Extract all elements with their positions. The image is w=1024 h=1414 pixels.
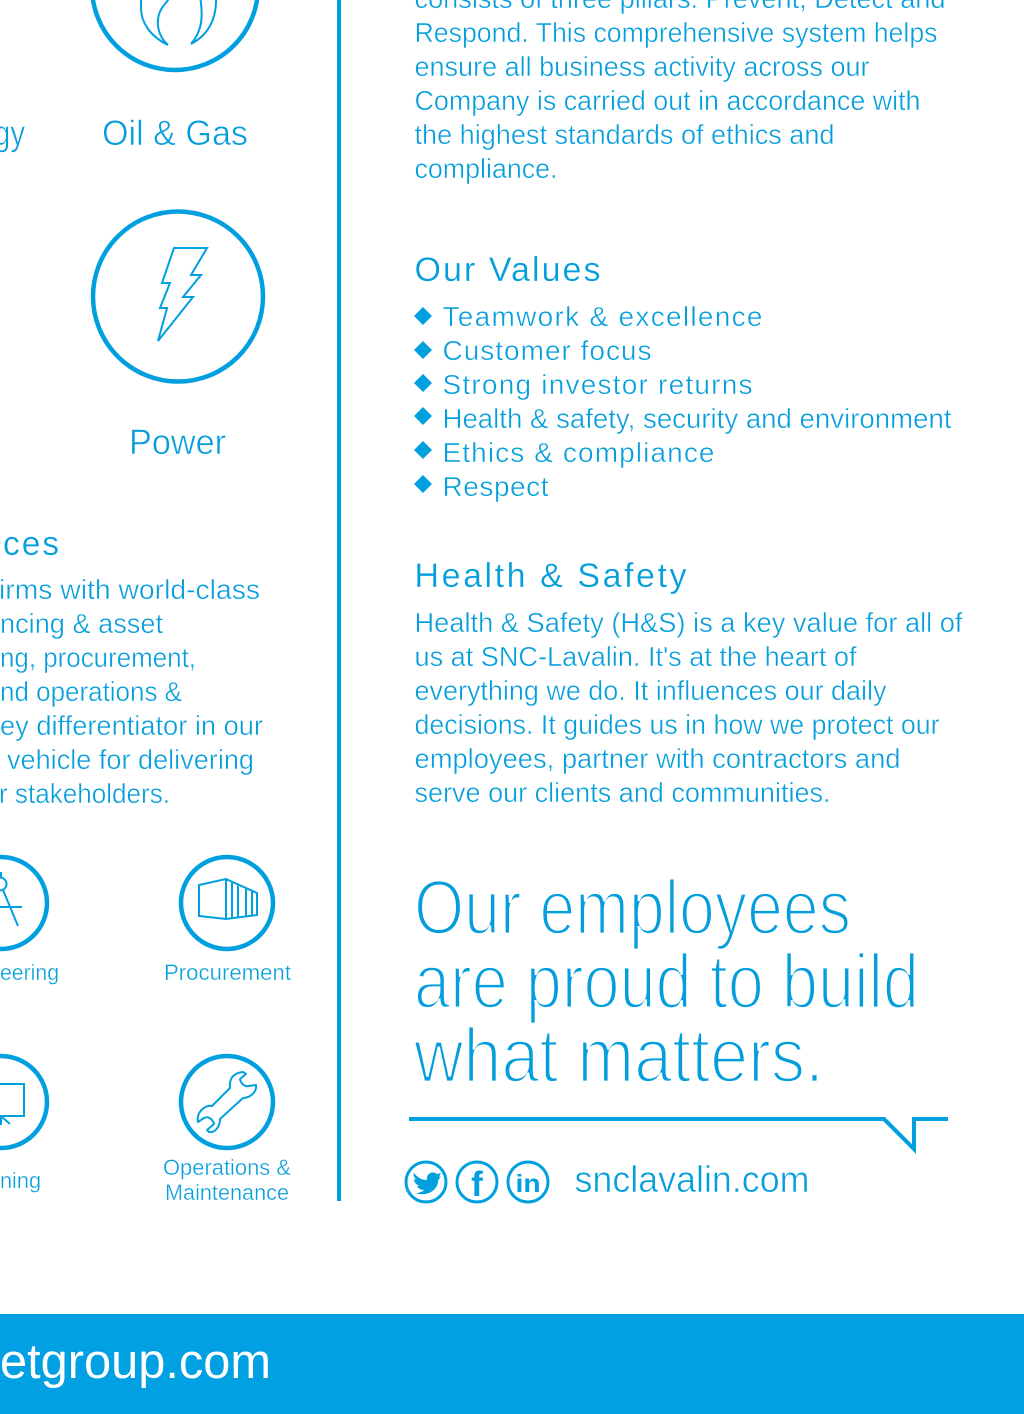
sector label: power: Power	[129, 423, 226, 462]
text block: health and safety description: everything we do. It influences our daily	[414, 675, 886, 706]
footer url (cropped): etgroup.com	[0, 1335, 271, 1389]
text block: services description (cropped): nd operations &	[0, 676, 182, 707]
bullet diamonds	[414, 307, 432, 493]
text block: services description (cropped): irms with world-class	[0, 574, 260, 605]
list items: Health & safety, security and environment	[442, 403, 952, 434]
text block: health and safety description: us at SNC-Lavalin. It's at the heart of	[414, 641, 857, 672]
text block: services description (cropped): vehicle for delivering	[7, 744, 254, 775]
list items: Ethics & compliance	[442, 437, 714, 468]
text block: services description (cropped): r stakeholders.	[0, 778, 170, 809]
icon: oil and gas flame	[92, 0, 258, 70]
list: our values	[414, 301, 952, 502]
text block: compliance intro: compliance.	[414, 153, 558, 184]
tagline: are proud to build	[414, 939, 919, 1025]
footer band	[0, 1314, 1024, 1414]
tagline: what matters.	[413, 1013, 824, 1099]
heading: our values: Our Values	[414, 251, 600, 289]
text block: compliance intro: Respond. This comprehensive system helps	[414, 17, 938, 48]
text block: compliance intro: ensure all business activity across our	[414, 51, 870, 82]
text block: health and safety description: Health & Safety (H&S) is a key value for all of	[414, 607, 963, 638]
text block: compliance intro: Company is carried out in accordance with	[414, 85, 920, 116]
social icons	[406, 1162, 548, 1204]
service label: operations and maintenance	[163, 1155, 291, 1205]
text block: health and safety description: decisions. It guides us in how we protect our	[414, 709, 940, 740]
text block: services description (cropped): ncing & asset	[0, 608, 163, 639]
icon: procurement shipping container	[181, 857, 273, 949]
text block: health and safety description: employees, partner with contractors and	[414, 743, 900, 774]
icon: linkedin: in	[516, 1170, 540, 1198]
service label: operations and maintenance: Operations &	[163, 1155, 291, 1180]
icon: facebook	[457, 1162, 497, 1204]
list items: Strong investor returns	[442, 369, 752, 400]
service label: procurement: Procurement	[164, 960, 291, 985]
text block: services description (cropped): ng, procurement,	[0, 642, 196, 673]
text block: services description (cropped)	[0, 574, 263, 809]
icon: power lightning bolt	[93, 212, 263, 382]
text block: services description (cropped): ey differentiator in our	[0, 710, 263, 741]
heading: health and safety: Health & Safety	[414, 557, 686, 595]
website link: snclavalin.com	[574, 1159, 810, 1200]
service label: planning (cropped): ning	[0, 1168, 41, 1193]
sector label: oil and gas: Oil & Gas	[102, 114, 248, 153]
icon: linkedin	[508, 1162, 548, 1202]
icon: facebook: f	[471, 1165, 483, 1204]
list items: Customer focus	[442, 335, 652, 366]
icon: planning presentation board	[0, 1056, 47, 1148]
icon: engineering compass	[0, 857, 47, 949]
text block: compliance intro: the highest standards of ethics and	[414, 119, 834, 150]
speech bubble line	[409, 1119, 948, 1149]
list items	[442, 301, 952, 502]
icon: operations wrench	[181, 1056, 273, 1148]
icon: twitter	[406, 1162, 446, 1202]
heading: services (cropped): ces	[3, 525, 61, 563]
vertical divider	[337, 0, 341, 1201]
text block: health and safety description	[414, 607, 963, 808]
list items: Teamwork & excellence	[442, 301, 762, 332]
panel: left column sectors and services	[0, 0, 291, 1205]
service label: engineering (cropped): eering	[0, 960, 59, 985]
text block: health and safety description: serve our clients and communities.	[414, 777, 830, 808]
list items: Respect	[442, 471, 549, 502]
tagline: Our employees	[414, 865, 851, 951]
text block: compliance intro	[414, 0, 946, 184]
service label: operations and maintenance: Maintenance	[165, 1180, 289, 1205]
tagline	[413, 865, 919, 1099]
